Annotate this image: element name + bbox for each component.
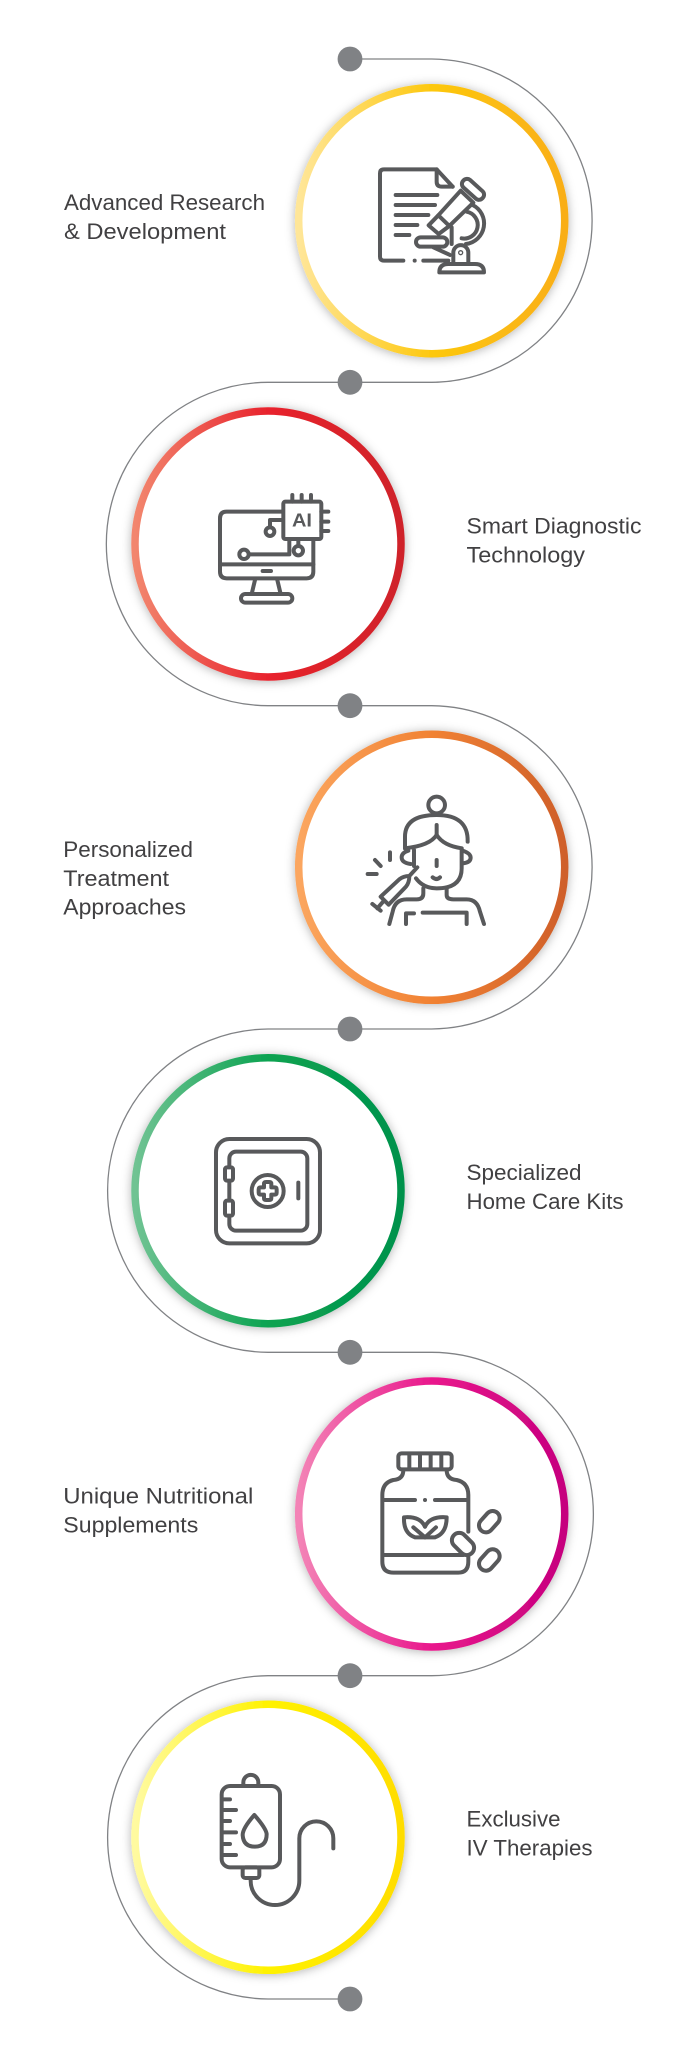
icon: woman with syringe — [368, 797, 484, 924]
icon: AI monitor: AI — [292, 510, 312, 531]
label: Smart Diagnostic Technology: Smart Diagnostic — [466, 513, 642, 538]
connector dots — [338, 47, 362, 2011]
label: Personalized Treatment Approaches — [63, 837, 193, 920]
icon: supplement bottle — [382, 1453, 503, 1574]
label: Advanced Research & Development: & Development — [64, 219, 227, 244]
label: Specialized Home Care Kits: Specialized — [466, 1160, 582, 1185]
label: Exclusive IV Therapies — [466, 1806, 592, 1860]
label: Exclusive IV Therapies: Exclusive — [466, 1806, 560, 1832]
label: Unique Nutritional Supplements: Supplements — [63, 1512, 198, 1538]
ring: yellow — [135, 1704, 401, 1970]
icon: IV bag — [222, 1775, 333, 1905]
label: Smart Diagnostic Technology: Technology — [466, 542, 586, 568]
icon: AI monitor — [220, 495, 328, 603]
icon: document and microscope — [380, 169, 486, 272]
ring: yellow-orange — [299, 88, 565, 354]
label: Personalized Treatment Approaches: Treatment — [63, 866, 170, 891]
label: Advanced Research & Development — [64, 190, 265, 244]
ring: pink — [299, 1381, 565, 1647]
label: Smart Diagnostic Technology — [466, 513, 642, 568]
ring: orange — [299, 734, 565, 1000]
label: Unique Nutritional Supplements: Unique Nutritional — [63, 1484, 253, 1508]
label: Specialized Home Care Kits — [466, 1160, 624, 1214]
connector path — [106, 59, 593, 1999]
label: Exclusive IV Therapies: IV Therapies — [466, 1836, 592, 1860]
label: Unique Nutritional Supplements — [63, 1484, 253, 1538]
label: Advanced Research & Development: Advanced Research — [64, 190, 265, 215]
ring: red — [135, 411, 401, 677]
label: Specialized Home Care Kits: Home Care Kits — [466, 1189, 624, 1214]
icon: medical safe — [216, 1139, 320, 1243]
label: Personalized Treatment Approaches: Approaches — [63, 894, 186, 920]
label: Personalized Treatment Approaches: Personalized — [63, 837, 193, 862]
ring: green — [135, 1058, 401, 1324]
